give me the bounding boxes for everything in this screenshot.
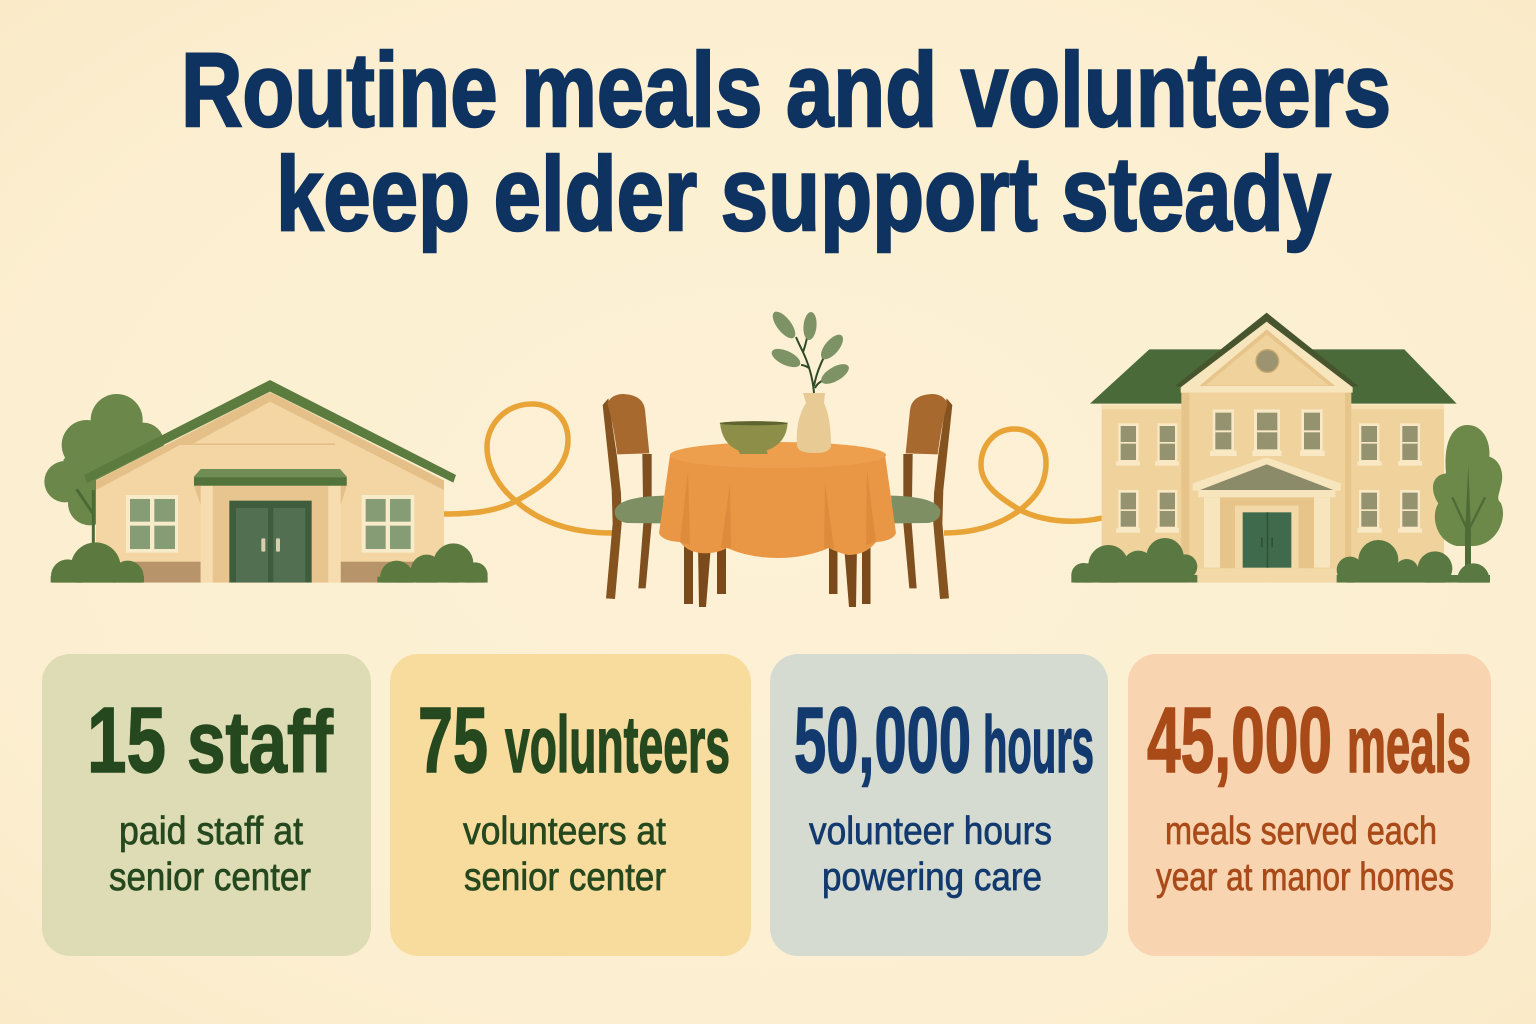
stat: 50,000 hours: 50,000 bbox=[794, 688, 971, 792]
description: powering care bbox=[822, 856, 1042, 899]
description: senior center bbox=[464, 856, 666, 899]
description bbox=[1156, 810, 1454, 899]
panel: staff card bbox=[42, 654, 371, 956]
brown base panels bbox=[133, 562, 414, 583]
manor walls bbox=[1102, 390, 1444, 583]
table legs bbox=[684, 540, 870, 607]
stat: 75 volunteers bbox=[418, 688, 730, 792]
description: volunteers at bbox=[463, 810, 666, 853]
wing windows bbox=[1116, 423, 1422, 533]
stat: 75 volunteers: 75 bbox=[418, 688, 488, 792]
stat: 75 volunteers: volunteers bbox=[505, 700, 730, 789]
description: meals served each bbox=[1165, 810, 1437, 853]
title bbox=[181, 32, 1391, 253]
center gable bbox=[1175, 313, 1358, 393]
description: year at manor homes bbox=[1156, 856, 1454, 899]
panel: hours card: hours bbox=[983, 700, 1094, 789]
stat: 45,000 meals: 45,000 bbox=[1147, 688, 1332, 792]
illustration: manor home bbox=[1071, 313, 1503, 595]
stat: 15 staff bbox=[87, 688, 334, 792]
panel: hours card bbox=[770, 654, 1108, 956]
bush right bbox=[377, 543, 488, 583]
manor door bbox=[1243, 512, 1291, 568]
right chair bbox=[891, 394, 952, 599]
steps bbox=[1192, 568, 1342, 583]
connector: ribbon from table to manor home bbox=[944, 429, 1102, 533]
upper center windows bbox=[1210, 409, 1325, 456]
porch bbox=[194, 469, 347, 583]
door bbox=[229, 501, 312, 583]
stat: 15 staff: staff bbox=[187, 694, 334, 791]
portico bbox=[1193, 457, 1341, 568]
description bbox=[463, 810, 666, 899]
bush left bbox=[50, 542, 144, 583]
wing roof bbox=[1090, 349, 1457, 404]
shrubs right bbox=[1336, 540, 1490, 583]
panel: volunteers card bbox=[390, 654, 751, 956]
left chair bbox=[603, 394, 664, 599]
window left bbox=[126, 495, 178, 553]
illustration: dining table with chairs bbox=[603, 308, 952, 607]
connector: ribbon from senior center to table bbox=[444, 404, 612, 533]
vase with plant bbox=[769, 308, 852, 453]
description: volunteer hours bbox=[809, 810, 1052, 853]
tree right bbox=[1433, 425, 1503, 566]
illustration: senior center house bbox=[44, 380, 488, 594]
description bbox=[109, 810, 311, 899]
house wall bbox=[96, 392, 444, 583]
description bbox=[809, 810, 1052, 899]
roof bbox=[84, 380, 456, 483]
description: senior center bbox=[109, 856, 311, 899]
bowl bbox=[720, 421, 788, 454]
shrubs left bbox=[1071, 538, 1197, 587]
tablecloth bbox=[659, 442, 896, 558]
icon: tree behind house bbox=[44, 394, 164, 547]
stat: 15 staff: 15 bbox=[87, 688, 166, 792]
window right bbox=[362, 495, 414, 553]
description: paid staff at bbox=[119, 810, 303, 853]
panel: meals card bbox=[1128, 654, 1491, 956]
